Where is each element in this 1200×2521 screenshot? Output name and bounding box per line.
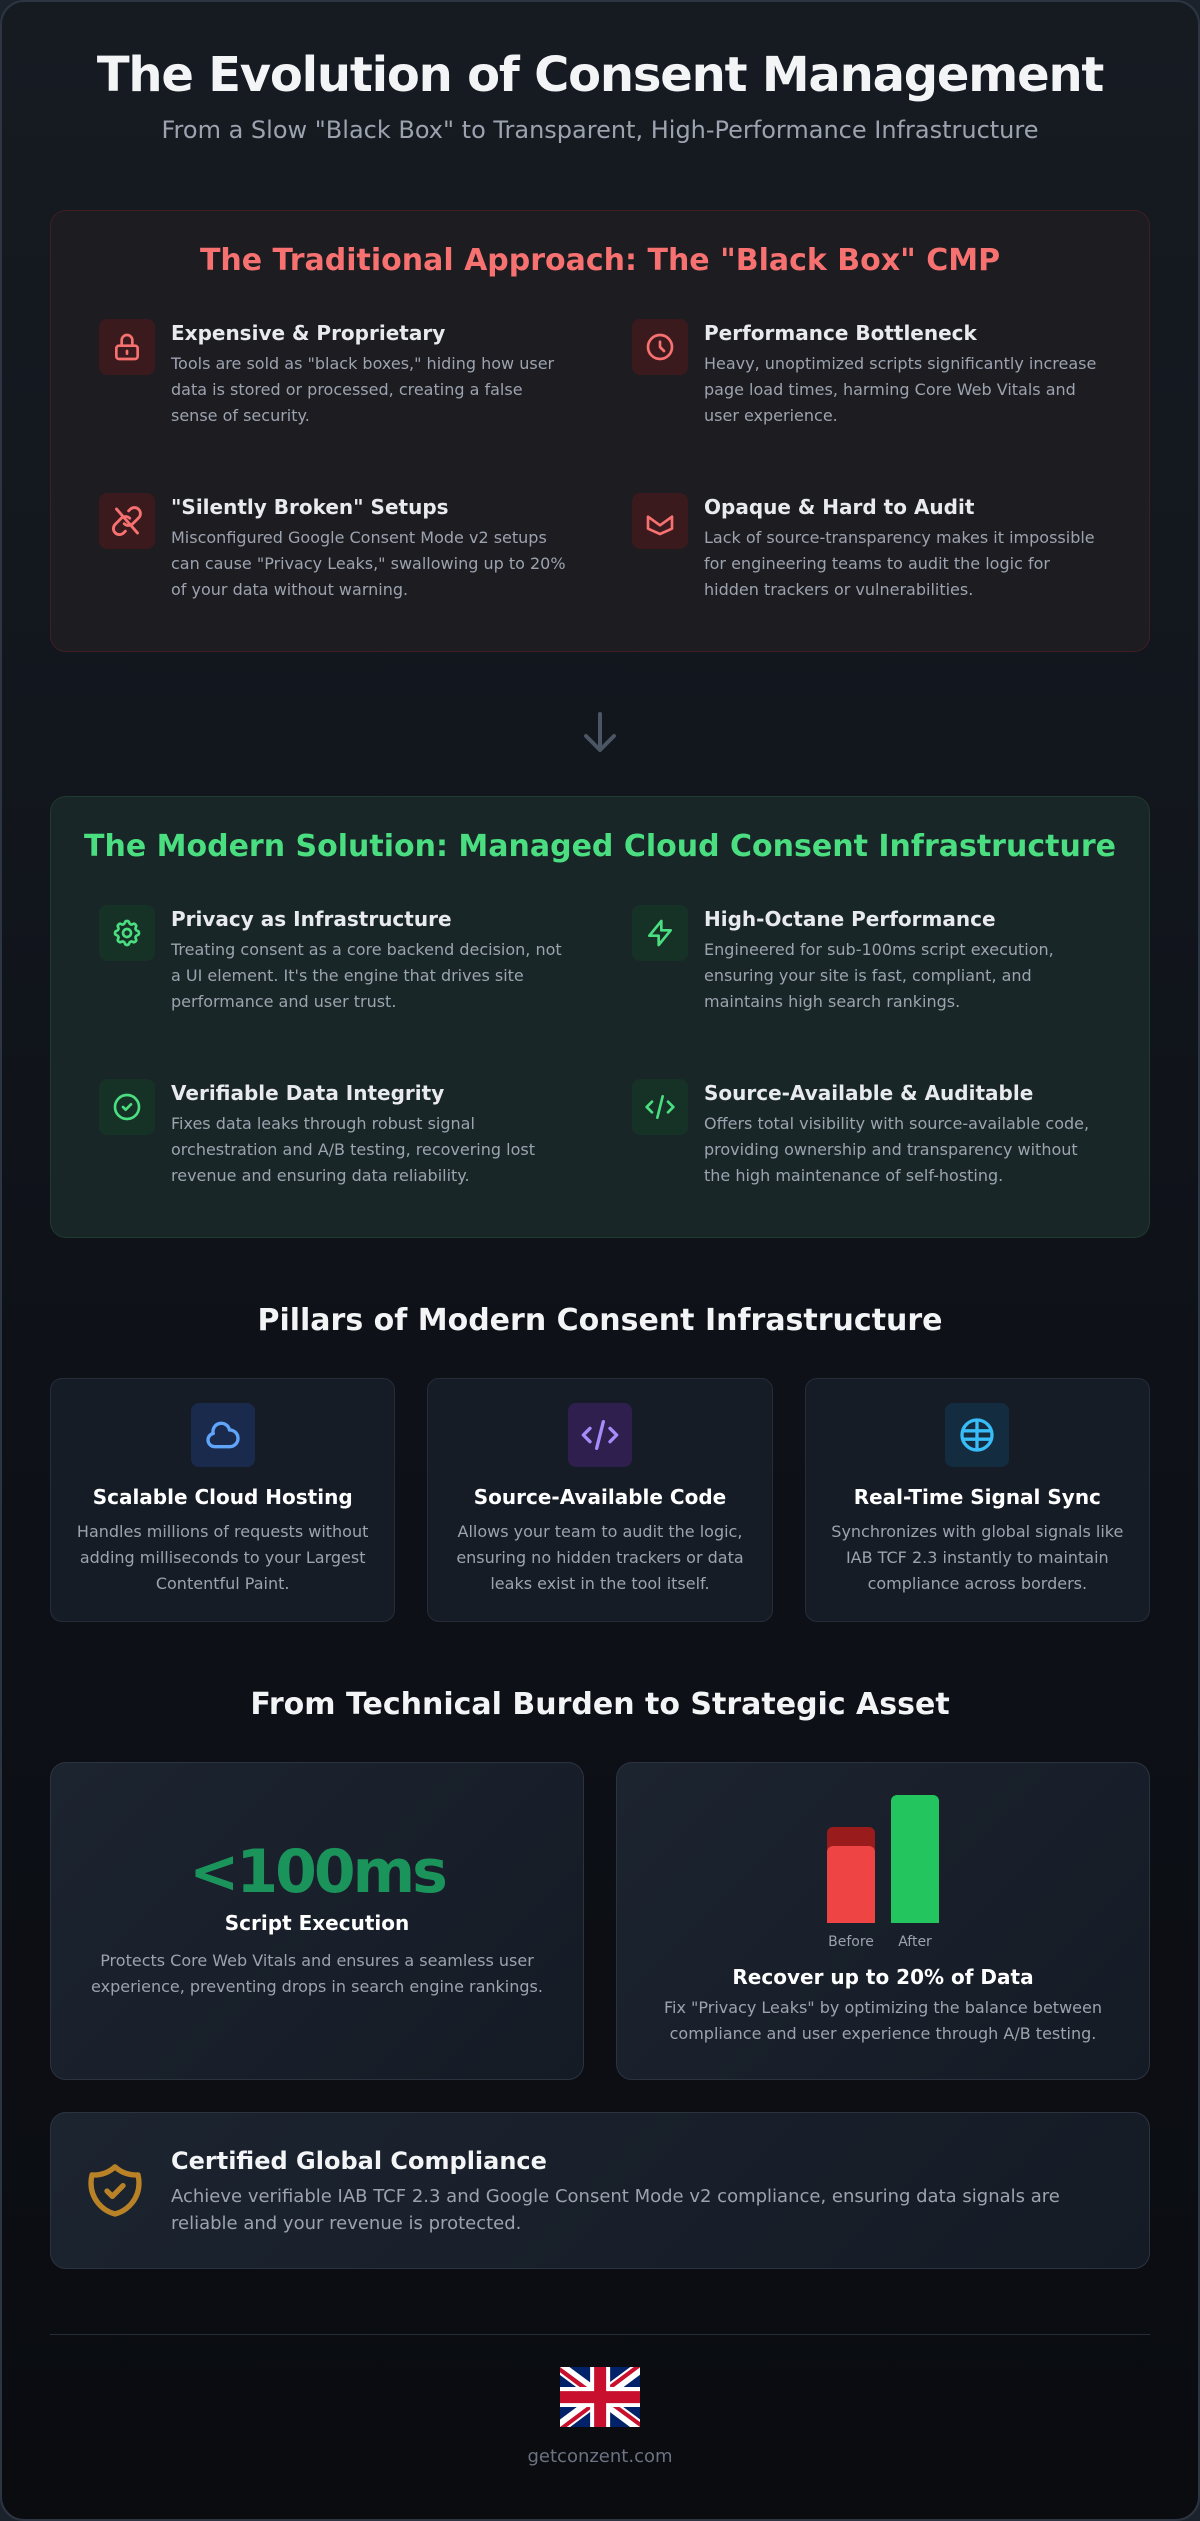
- metric value: <100ms: [189, 1837, 445, 1907]
- item: source-available and auditable: the high maintenance of self-hosting.: [704, 1166, 1003, 1185]
- arrow: down: [584, 712, 616, 752]
- icon: UK flag: [560, 2367, 640, 2427]
- item: performance bottleneck: [632, 319, 1096, 425]
- icon: clock: [632, 319, 688, 375]
- item: performance bottleneck: Heavy, unoptimized scripts significantly increase: [704, 354, 1096, 373]
- panel: traditional approach: [50, 210, 1150, 652]
- label: before: Before: [828, 1934, 874, 1950]
- panel: modern solution: [50, 796, 1150, 1238]
- card: scalable cloud hosting: [50, 1378, 395, 1622]
- item: source-available and auditable: [632, 1079, 1089, 1185]
- card: scalable cloud hosting: adding milliseconds to your Largest: [80, 1548, 365, 1567]
- card: source-available code: leaks exist in the tool itself.: [490, 1574, 710, 1593]
- card: real-time signal sync: [805, 1378, 1150, 1622]
- icon: code: [568, 1403, 632, 1467]
- item: privacy as infrastructure: Privacy as Infrastructure: [171, 907, 452, 931]
- item: high-octane performance: [632, 905, 1054, 1011]
- metric description: compliance and user experience through A/B testing.: [670, 2024, 1096, 2043]
- bar: after: [891, 1795, 939, 1923]
- card: scalable cloud hosting: Scalable Cloud Hosting: [93, 1485, 353, 1509]
- icon: lock: [99, 319, 155, 375]
- item: silently broken setups: Misconfigured Google Consent Mode v2 setups: [171, 528, 547, 547]
- item: opaque and hard to audit: Lack of source-transparency makes it impossible: [704, 528, 1095, 547]
- footer: [50, 2334, 1150, 2494]
- icon: lightning bolt: [632, 905, 688, 961]
- title: The Evolution of Consent Management: [97, 47, 1103, 103]
- item: silently broken setups: of your data without warning.: [171, 580, 408, 599]
- item: expensive and proprietary: sense of security.: [171, 406, 310, 425]
- item: opaque and hard to audit: for engineering teams to audit the logic for: [704, 554, 1050, 573]
- icon: code: [632, 1079, 688, 1135]
- subtitle: From a Slow "Black Box" to Transparent, High-Performance Infrastructure: [162, 116, 1038, 144]
- card: real-time signal sync: compliance across borders.: [868, 1574, 1087, 1593]
- icon: gear: [99, 905, 155, 961]
- item: expensive and proprietary: [99, 319, 554, 425]
- metric description: experience, preventing drops in search engine rankings.: [91, 1977, 543, 1996]
- icon: cloud: [191, 1403, 255, 1467]
- item: high-octane performance: ensuring your site is fast, compliant, and: [704, 966, 1032, 985]
- item: verifiable data integrity: [99, 1079, 535, 1185]
- card: scalable cloud hosting: Handles millions of requests without: [77, 1522, 368, 1541]
- compliance description: reliable and your revenue is protected.: [171, 2213, 521, 2234]
- card: script execution metric: [50, 1762, 584, 2080]
- item: source-available and auditable: Source-Available & Auditable: [704, 1081, 1033, 1105]
- item: verifiable data integrity: Verifiable Data Integrity: [171, 1081, 444, 1105]
- item: verifiable data integrity: Fixes data leaks through robust signal: [171, 1114, 475, 1133]
- compliance title: Certified Global Compliance: [171, 2147, 547, 2175]
- item: expensive and proprietary: data is stored or processed, creating a false: [171, 380, 523, 399]
- panel heading: traditional approach: The Traditional Approach: The "Black Box" CMP: [200, 243, 1000, 278]
- bar: before total: [827, 1827, 875, 1923]
- metric description: [91, 1951, 543, 1996]
- compliance description: Achieve verifiable IAB TCF 2.3 and Google Consent Mode v2 compliance, ensuring data signals are: [171, 2186, 1060, 2206]
- card: source-available code: Allows your team to audit the logic,: [458, 1522, 742, 1541]
- card: scalable cloud hosting: Contentful Paint.: [156, 1574, 289, 1593]
- item: opaque and hard to audit: [632, 493, 1095, 599]
- item: privacy as infrastructure: a UI element. It's the engine that drives site: [171, 966, 524, 985]
- panel heading: modern solution: The Modern Solution: Managed Cloud Consent Infrastructure: [84, 829, 1116, 864]
- card: source-available code: [427, 1378, 773, 1622]
- compliance description: [171, 2186, 1060, 2234]
- item: privacy as infrastructure: Treating consent as a core backend decision, not: [171, 940, 562, 959]
- item: high-octane performance: Engineered for sub-100ms script execution,: [704, 940, 1054, 959]
- item: source-available and auditable: Offers total visibility with source-available code,: [704, 1114, 1089, 1133]
- item: opaque and hard to audit: hidden trackers or vulnerabilities.: [704, 580, 973, 599]
- icon: globe: [945, 1403, 1009, 1467]
- heading: strategic asset: From Technical Burden to Strategic Asset: [250, 1687, 950, 1722]
- card: real-time signal sync: Real-Time Signal Sync: [854, 1485, 1101, 1509]
- metric description: Protects Core Web Vitals and ensures a seamless user: [100, 1951, 534, 1970]
- metric label: Recover up to 20% of Data: [732, 1965, 1034, 1989]
- card: certified global compliance: [50, 2112, 1150, 2269]
- item: performance bottleneck: Performance Bottleneck: [704, 321, 977, 345]
- metric description: [664, 1998, 1102, 2043]
- metric label: Script Execution: [225, 1911, 409, 1935]
- footer url: getconzent.com: [527, 2446, 673, 2467]
- item: privacy as infrastructure: performance and user trust.: [171, 992, 396, 1011]
- bar: before recovered: [827, 1846, 875, 1923]
- item: silently broken setups: [99, 493, 566, 599]
- item: expensive and proprietary: Expensive & Proprietary: [171, 321, 445, 345]
- item: expensive and proprietary: Tools are sold as "black boxes," hiding how user: [171, 354, 554, 373]
- card: data recovery: [616, 1762, 1150, 2080]
- heading: pillars: Pillars of Modern Consent Infrastructure: [257, 1303, 943, 1338]
- item: source-available and auditable: providing ownership and transparency without: [704, 1140, 1078, 1159]
- label: after: After: [898, 1934, 932, 1950]
- item: opaque and hard to audit: Opaque & Hard to Audit: [704, 495, 974, 519]
- card: source-available code: Source-Available Code: [474, 1485, 726, 1509]
- item: high-octane performance: maintains high search rankings.: [704, 992, 960, 1011]
- item: verifiable data integrity: revenue and ensuring data reliability.: [171, 1166, 470, 1185]
- metric description: Fix "Privacy Leaks" by optimizing the balance between: [664, 1998, 1102, 2017]
- item: high-octane performance: High-Octane Performance: [704, 907, 996, 931]
- item: performance bottleneck: page load times, harming Core Web Vitals and: [704, 380, 1076, 399]
- item: privacy as infrastructure: [99, 905, 562, 1011]
- icon: broken link: [99, 493, 155, 549]
- item: silently broken setups: can cause "Privacy Leaks," swallowing up to 20%: [171, 554, 566, 573]
- item: performance bottleneck: user experience.: [704, 406, 838, 425]
- icon: check circle: [99, 1079, 155, 1135]
- item: verifiable data integrity: orchestration and A/B testing, recovering lost: [171, 1140, 535, 1159]
- item: silently broken setups: "Silently Broken" Setups: [171, 495, 449, 519]
- card: source-available code: ensuring no hidden trackers or data: [456, 1548, 744, 1567]
- card: real-time signal sync: IAB TCF 2.3 instantly to maintain: [846, 1548, 1109, 1567]
- icon: shield check: [88, 2164, 142, 2217]
- icon: opaque chevron: [632, 493, 688, 549]
- bar chart: before and after: [827, 1795, 939, 1950]
- card: real-time signal sync: Synchronizes with global signals like: [831, 1522, 1123, 1541]
